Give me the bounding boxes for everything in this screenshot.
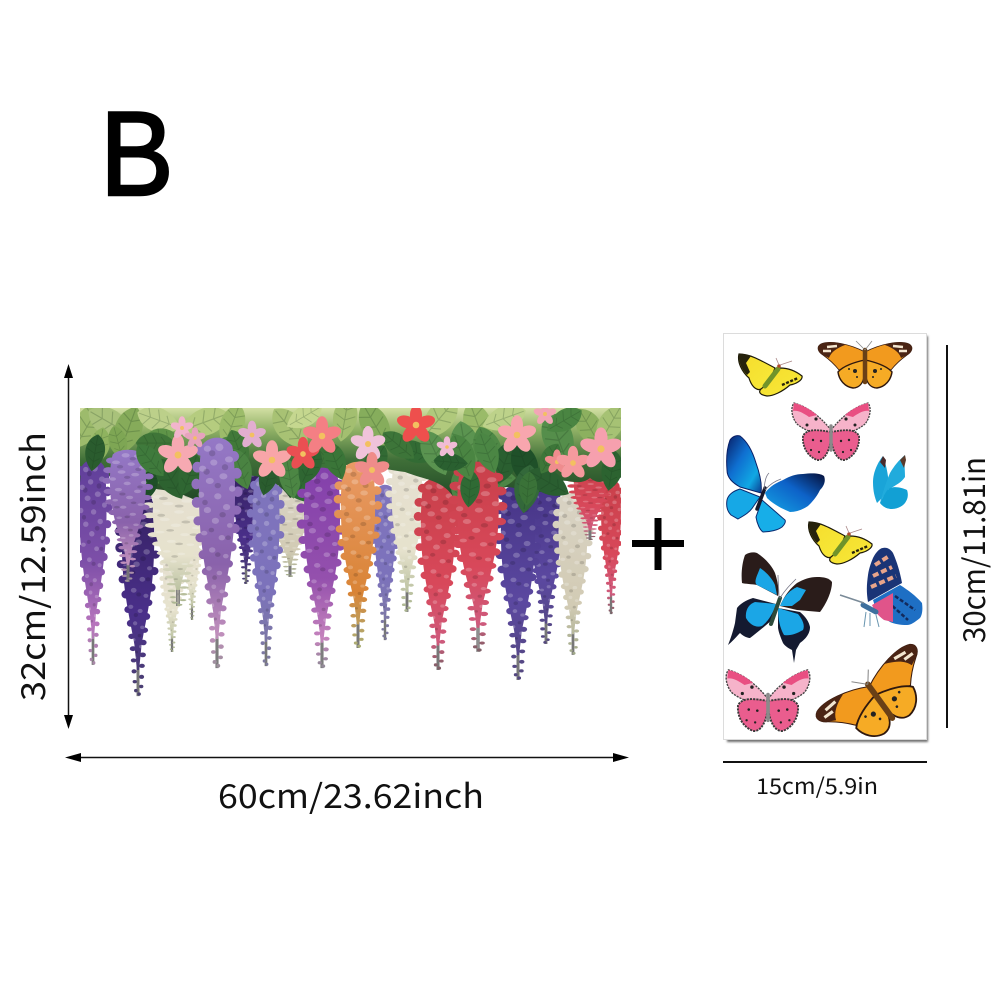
foliage band bbox=[80, 408, 621, 514]
wisteria clusters behind foliage bbox=[115, 458, 625, 696]
pink and red flowers bbox=[158, 408, 621, 486]
sheet shadow bbox=[727, 336, 928, 742]
panel: wisteria wall sticker bbox=[80, 408, 621, 696]
line: butterfly sheet height bbox=[946, 345, 948, 728]
wisteria clusters in front of foliage bbox=[74, 438, 507, 668]
label: wisteria height: 32cm/12.59inch bbox=[7, 432, 55, 701]
arrow: width of wisteria sticker bbox=[65, 753, 629, 762]
butterfly: large blue morpho bbox=[727, 436, 825, 532]
butterfly: orange top right bbox=[818, 341, 912, 388]
sheet bbox=[724, 334, 926, 740]
butterfly: blue and pink side view bbox=[840, 548, 922, 627]
label: butterfly sheet height: 30cm/11.81in bbox=[950, 457, 994, 643]
label: butterfly sheet width: 15cm/5.9in bbox=[756, 769, 878, 801]
label: wisteria width: 60cm/23.62inch bbox=[218, 770, 484, 818]
heading letter B: B bbox=[100, 88, 174, 221]
icon: plus sign bbox=[632, 518, 684, 570]
line: butterfly sheet width bbox=[723, 761, 927, 763]
butterfly: yellow middle bbox=[809, 522, 872, 564]
butterfly: small blue side view bbox=[873, 455, 908, 509]
butterfly: pink bottom left bbox=[726, 670, 810, 731]
butterfly: orange bottom right bbox=[812, 639, 946, 760]
butterfly: pink centre bbox=[792, 403, 870, 460]
mid and dark leaves bbox=[136, 432, 172, 453]
butterfly: yellow top left bbox=[739, 354, 802, 396]
upper pale leaves bbox=[80, 408, 97, 447]
panel: butterfly sticker sheet bbox=[724, 334, 946, 760]
butterfly: black and blue swallowtail bbox=[728, 552, 832, 663]
front leaves over clusters bbox=[82, 429, 538, 508]
arrow: height of wisteria sticker bbox=[64, 364, 73, 729]
